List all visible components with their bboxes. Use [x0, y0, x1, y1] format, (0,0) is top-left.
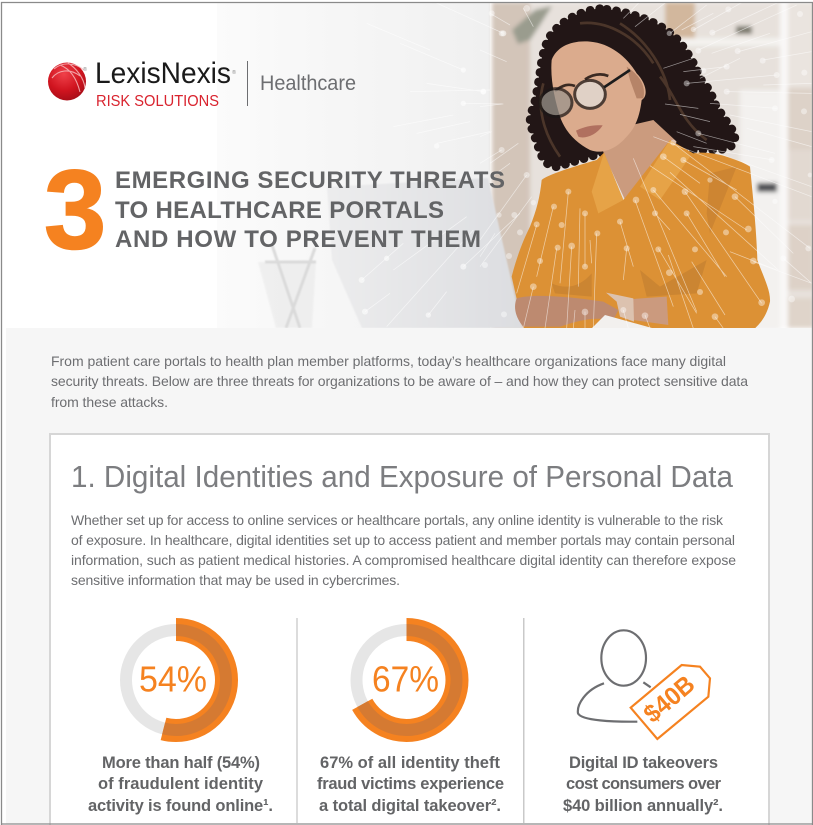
- chart: 54% donut: 54%: [139, 658, 207, 700]
- shirt: [512, 140, 770, 328]
- chart: 67% donut: 67%: [372, 658, 439, 700]
- stat text: 54%: [88, 754, 273, 815]
- stat text: $40B: $40 billion annually².: [563, 797, 723, 815]
- title: EMERGING SECURITY THREATS: [115, 167, 505, 194]
- chart: 54% donut: [126, 630, 226, 730]
- laptop: [327, 178, 522, 328]
- stat text: $40B: [563, 754, 723, 815]
- intro paragraph: From patient care portals to health plan member platforms, today’s healthcare organizations face many digital: [51, 353, 726, 369]
- section heading: 1. Digital Identities and Exposure of Personal Data: [71, 460, 733, 494]
- section paragraph: of exposure. In healthcare, digital identities set up to access patient and member portals may contain personal: [71, 532, 735, 548]
- section paragraph: sensitive information that may be used in cybercrimes.: [71, 572, 400, 588]
- intro paragraph: from these attacks.: [51, 394, 168, 410]
- network lines over light left area: [359, 0, 520, 327]
- stat text: $40B: Digital ID takeovers: [569, 754, 718, 772]
- column divider: [523, 618, 524, 823]
- stat text: 67%: 67% of all identity theft: [320, 754, 500, 772]
- stat text: 67%: [317, 754, 504, 815]
- content background panel: [6, 328, 812, 824]
- intro paragraph: [51, 353, 748, 410]
- logo divider: [247, 61, 248, 106]
- intro paragraph: security threats. Below are three threats for organizations to be aware of – and how they can protect sensitive data: [51, 373, 748, 389]
- stat text: 54%: activity is found online¹.: [88, 797, 273, 815]
- title: AND HOW TO PREVENT THEM: [115, 226, 481, 253]
- registered marks: ®: [83, 66, 87, 73]
- pen cup: [258, 245, 316, 328]
- wordmark: LexisNexis: [95, 57, 231, 90]
- chart: 67% donut: [356, 630, 457, 730]
- stat text: 54%: More than half (54%): [102, 754, 260, 772]
- neck: [603, 120, 677, 198]
- tagline: RISK SOLUTIONS: [96, 93, 219, 110]
- stat text: $40B: cost consumers over: [566, 775, 722, 793]
- title: TO HEALTHCARE PORTALS: [115, 197, 444, 224]
- logo: LexisNexis Risk Solutions: [48, 57, 236, 110]
- wordmark registered mark: ®: [232, 69, 236, 76]
- column divider: [296, 618, 298, 823]
- stat text: 67%: a total digital takeover².: [319, 797, 501, 815]
- section paragraph: Whether set up for access to online services or healthcare portals, any online identity is vulnerable to the risk: [71, 512, 724, 528]
- eyebrows: [555, 74, 608, 91]
- icon: red globe: [48, 62, 86, 100]
- stat text: 67%: fraud victims experience: [317, 775, 504, 793]
- label: Healthcare: Healthcare: [260, 72, 356, 95]
- section paragraph: information, such as patient medical histories. A compromised healthcare digital identity can therefore expose: [71, 552, 736, 568]
- big number 3: 3: [44, 147, 106, 272]
- hands: [515, 296, 618, 327]
- stat text: 54%: of fraudulent identity: [98, 775, 264, 793]
- icon: person with $40B price tag: $40B: [639, 670, 700, 729]
- panel: threat 1 card: [50, 434, 769, 825]
- hair: [530, 8, 735, 167]
- face: [551, 41, 646, 152]
- network lines upper area and woman: [480, 2, 812, 328]
- glasses: [540, 70, 630, 117]
- section paragraph: [71, 512, 736, 588]
- icon: person with $40B price tag: [578, 630, 710, 739]
- lips: [576, 125, 603, 137]
- hero photo: woman at laptop with radial network lines: [217, 0, 813, 330]
- watch: [606, 293, 634, 322]
- title: [115, 167, 505, 253]
- woman: [512, 8, 770, 328]
- paper on desk: [592, 315, 653, 328]
